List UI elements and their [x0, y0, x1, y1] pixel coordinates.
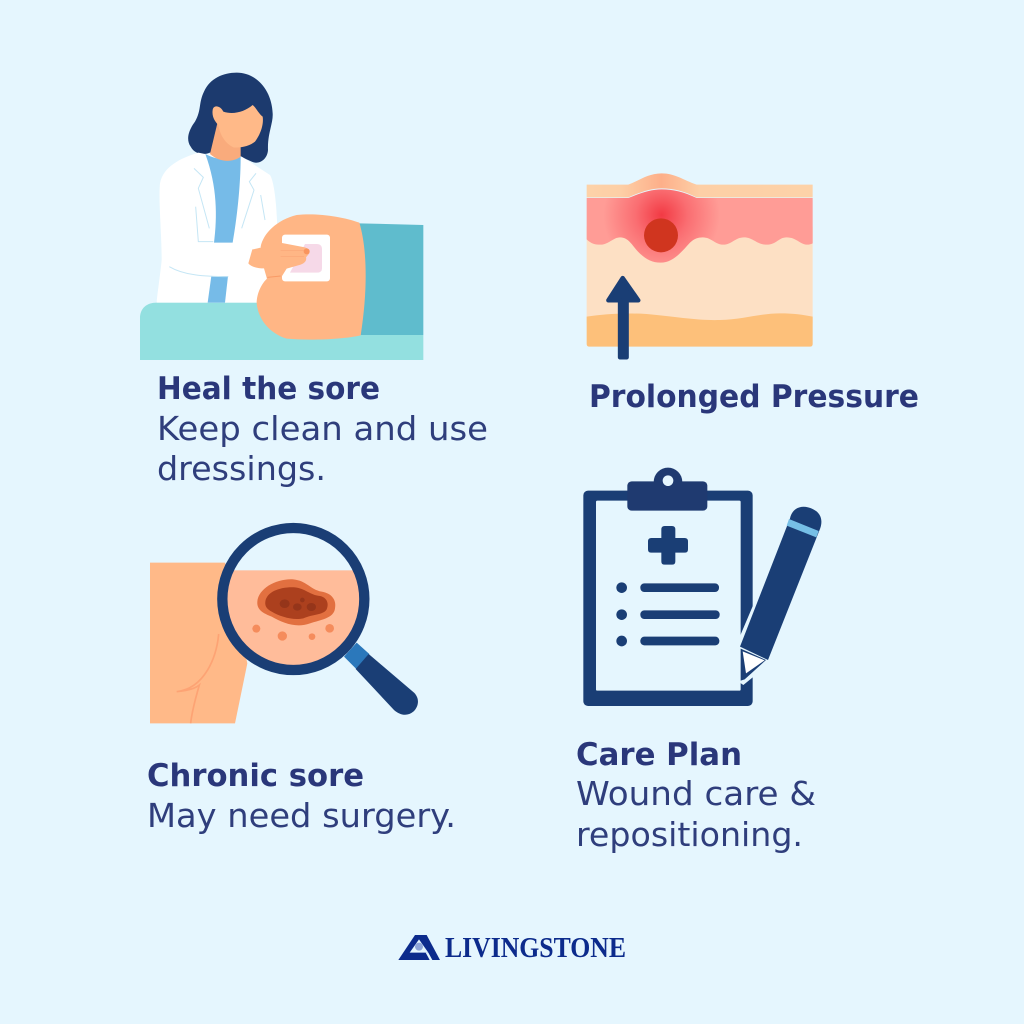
illustration: magnified sore: [150, 528, 418, 723]
pencil band: [787, 519, 819, 537]
heading: Chronic sore: [147, 758, 364, 794]
clipboard board: [583, 491, 753, 706]
hand: [248, 243, 310, 280]
illustration: doctor dressing a sore: [140, 73, 423, 360]
dressing: [282, 235, 330, 281]
lab coat: [157, 153, 277, 303]
logo mark: [398, 935, 440, 960]
body text: repositioning.: [576, 815, 803, 854]
body text: [157, 409, 488, 488]
coat folds: [169, 168, 265, 277]
handle collar: [344, 643, 369, 669]
patient body: [257, 214, 366, 340]
wound spots: [280, 598, 316, 611]
pencil tip: [741, 649, 766, 681]
dermis layer: [587, 227, 813, 323]
epidermis: [587, 173, 813, 197]
body crease: [177, 634, 219, 723]
panel: prolonged pressure: [587, 173, 919, 415]
heading: Care Plan: [576, 737, 742, 773]
body text: Wound care &: [576, 774, 816, 813]
pencil outline: [736, 515, 823, 685]
lens fill: [227, 532, 360, 666]
panel: heal the sore: [140, 73, 488, 488]
heading: Heal the sore: [157, 371, 380, 407]
clip: [627, 468, 707, 511]
handle: [356, 654, 418, 715]
panel: care plan: [576, 468, 823, 854]
skin spots: [252, 624, 334, 641]
hair: [188, 73, 273, 163]
neck: [210, 123, 241, 161]
illustration: skin cross-section: [587, 173, 813, 357]
logo: [398, 933, 626, 964]
heading: Prolonged Pressure: [589, 379, 919, 415]
body text: dressings.: [157, 449, 326, 488]
sore core: [644, 218, 678, 252]
face: [212, 105, 263, 148]
magnified skin: [228, 570, 360, 665]
panel: chronic sore: [147, 528, 456, 835]
lens ring: [222, 528, 364, 670]
logo wordmark: LIVINGSTONE: [445, 933, 626, 964]
inflamed layer: [587, 189, 813, 263]
bed: [140, 303, 423, 360]
body text: May need surgery.: [147, 796, 456, 835]
illustration: clipboard and pencil: [583, 468, 823, 706]
body: [150, 563, 247, 723]
medical cross: [648, 526, 688, 565]
paper: [596, 501, 741, 691]
pencil body: [740, 507, 821, 660]
fat layer: [587, 313, 813, 347]
fingertips: [304, 248, 310, 254]
shirt: [205, 154, 241, 243]
arrow: pressure: [608, 278, 638, 357]
blanket: [359, 223, 423, 335]
body text: Keep clean and use: [157, 409, 488, 448]
body text: [576, 774, 816, 854]
wound: [257, 579, 335, 625]
wound pad: [290, 244, 322, 273]
checklist: [616, 582, 720, 646]
